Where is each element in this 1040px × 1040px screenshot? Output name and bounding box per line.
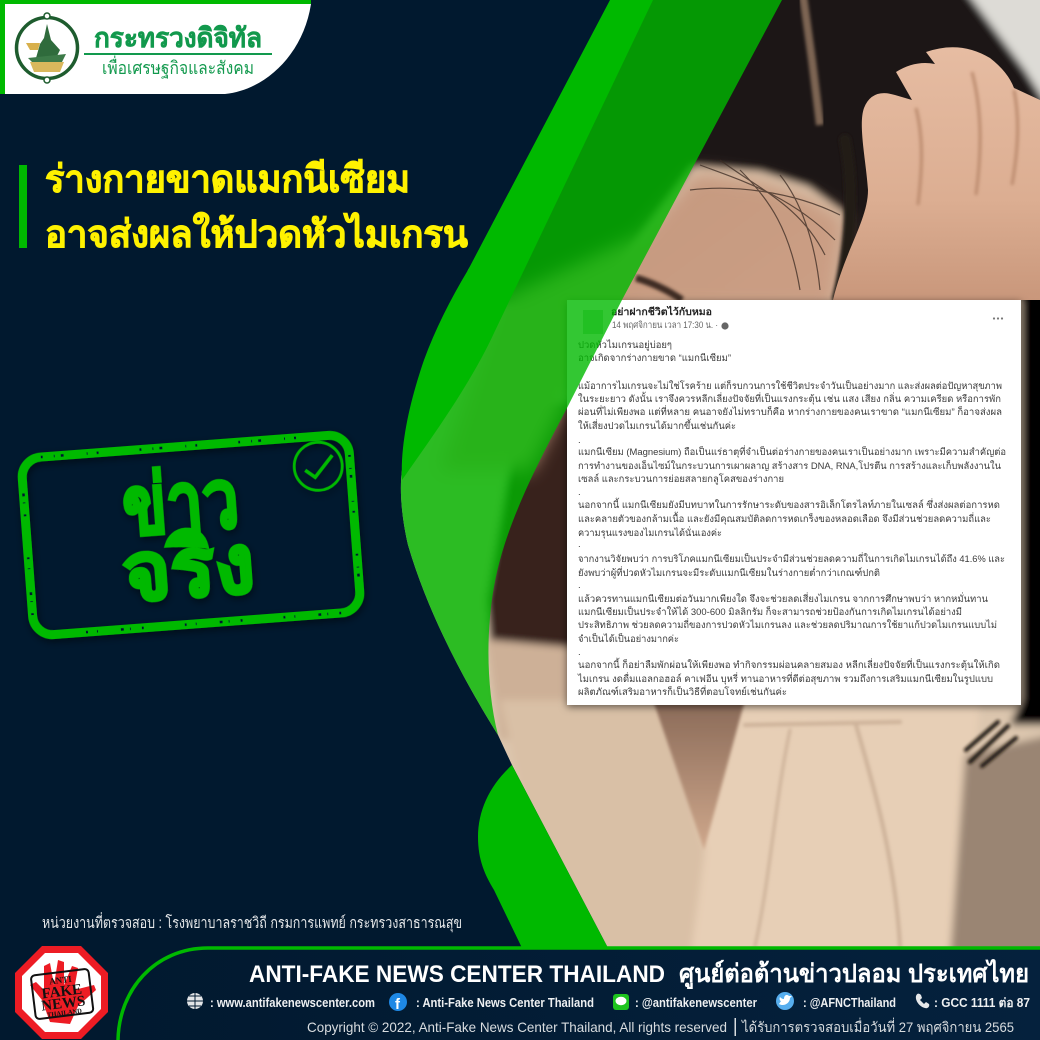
- post body text: .: [578, 435, 581, 446]
- post body text: ในระยะยาว ดังนั้น เราจึงควรหลีกเลี่ยงปัจจัยที่เป็นแรงกระตุ้น เช่น แสง เสียง กลิ่น ความเครียด หรือการพัก: [578, 391, 1001, 405]
- icon: red hand: [30, 960, 96, 1024]
- badge stamp: THAILAND: [47, 1008, 83, 1019]
- line account: : @antifakenewscenter: [635, 996, 757, 1010]
- photo: woman with headache: [380, 0, 1040, 960]
- icon: phone: [916, 994, 929, 1008]
- headline: ร่างกายขาดแมกนีเซียม: [45, 159, 410, 201]
- post body text: อาจเกิดจากร่างกายขาด “แมกนีเซียม”: [578, 352, 731, 364]
- hotline: : GCC 1111 ต่อ 87: [934, 996, 1030, 1010]
- post body text: ปวดหัวไมเกรนอยู่บ่อยๆ: [578, 339, 672, 351]
- translucent green swoosh: [401, 0, 782, 735]
- source agency: หน่วยงานที่ตรวจสอบ : โรงพยาบาลราชวิถี กรมการแพทย์ กระทรวงสาธารณสุข: [42, 912, 462, 933]
- verified date: ได้รับการตรวจสอบเมื่อวันที่ 27 พฤศจิกายน 2565: [741, 1018, 1014, 1035]
- stamp text: ข่าว: [119, 453, 242, 553]
- post date: 14 พฤศจิกายน เวลา 17:30 น. ·: [612, 319, 718, 330]
- post body text: [577, 339, 1006, 698]
- footer title thai: ศูนย์ต่อต้านข่าวปลอม ประเทศไทย: [679, 958, 1029, 990]
- lower green blob: [478, 765, 608, 948]
- footer title: ANTI-FAKE NEWS CENTER THAILAND: [249, 961, 665, 988]
- badge stamp: NEWS: [40, 993, 86, 1015]
- post author: อย่าฝากชีวิตไว้กับหมอ: [611, 305, 712, 318]
- hand: [833, 47, 1040, 300]
- neck V: [653, 700, 745, 850]
- icon: line: [613, 994, 629, 1010]
- post body text: แมกนีเซียม (Magnesium) ถือเป็นแร่ธาตุที่จำเป็นต่อร่างกายของคนเราเป็นอย่างมาก เพราะมีความสำคัญต่อ: [578, 445, 1006, 458]
- post body text: ความรุนแรงของไมเกรนได้นั่นเองค่ะ: [578, 526, 722, 539]
- post body text: แม้อาการไมเกรนจะไม่ใช่โรคร้าย แต่ก็รบกวนการใช้ชีวิตประจำวันเป็นอย่างมาก และส่งผลต่อปัญหาสุขภาพ: [578, 379, 1002, 392]
- globe glyph: [721, 322, 729, 330]
- post avatar: [583, 310, 603, 334]
- post body text: แล้วควรทานแมกนีเซียมต่อวันมากเพียงใด จึงจะช่วยลดเสี่ยงไมเกรน จากการศึกษาพบว่า หากหมั่นทาน: [578, 592, 988, 605]
- badge stamp: FAKE: [41, 982, 83, 1002]
- post body text: ให้เสี่ยงปวดไมเกรนได้มากขึ้นเช่นกันค่ะ: [578, 418, 736, 432]
- scalp parting: [803, 0, 820, 125]
- icon: twitter: [776, 992, 794, 1010]
- post body text: ไมเกรน งดดื่มแอลกอฮอล์ คาเฟอีน บุหรี่ ทานอาหารที่ดีต่อสุขภาพ รวมถึงการเสริมแมกนีเซียมในรูปแบบ: [577, 672, 993, 685]
- post body text: .: [578, 487, 581, 498]
- post body text: นอกจากนี้ ก็อย่าลืมพักผ่อนให้เพียงพอ ทำกิจกรรมผ่อนคลายสมอง หลีกเลี่ยงปัจจัยที่เป็นแรงกระตุ้นให้เกิด: [578, 657, 1000, 671]
- twitter account: : @AFNCThailand: [803, 996, 896, 1010]
- icon: ministry emblem: [16, 13, 78, 83]
- icon: facebook: f: [395, 996, 401, 1013]
- post body text: จากงานวิจัยพบว่า การบริโภคแมกนีเซียมเป็นประจำมีส่วนช่วยลดความถี่ในการเกิดไมเกรนได้ถึง 41.6% และ: [578, 552, 1005, 565]
- stamp: true news: [21, 434, 361, 636]
- stamp: true news: จริง: [119, 518, 258, 619]
- eyebrow: [636, 278, 682, 300]
- headline: [19, 159, 468, 256]
- facebook post card: [567, 300, 1021, 705]
- copyright: Copyright © 2022, Anti-Fake News Center Thailand, All rights reserved: [307, 1019, 727, 1035]
- footer panel: [118, 948, 1040, 1040]
- post body text: .: [578, 539, 581, 550]
- ministry name: กระทรวงดิจิทัล: [94, 23, 262, 53]
- headline: อาจส่งผลให้ปวดหัวไมเกรน: [45, 212, 468, 256]
- fine hairs on hairline: [690, 160, 840, 290]
- post body text: ผ่อนที่ไม่เพียงพอ แต่ที่หลาย คนอาจยังไม่ทราบก็คือ หากร่างกายของคนเราขาด “แมกนีเซียม” ก็อาจส่งผล: [578, 405, 1002, 418]
- solid green band: [402, 0, 653, 480]
- more menu: [993, 317, 1003, 320]
- post body text: การทำงานของเอ็นไซม์ในกระบวนการเผาผลาญ สร้างสาร DNA, RNA,โปรตีน การสร้างและเก็บพลังงานใน: [578, 459, 1001, 472]
- post body text: ยังพบว่าผู้ที่ปวดหัวไมเกรนจะมีระดับแมกนีเซียมในร่างกายต่ำกว่าเกณฑ์ปกติ: [578, 566, 880, 579]
- post body text: เซลล์ และกระบวนการย่อยสลายกลูโคสของร่างกาย: [578, 473, 784, 485]
- post body text: แมกนีเซียมเป็นประจำให้ได้ 300-600 มิลลิกรัม ก็จะสามารถช่วยป้องกันการเกิดไมเกรนได้อย่างมี: [578, 605, 962, 618]
- post body text: ประสิทธิภาพ ช่วยลดความถี่ของการปวดหัวไมเกรนลง และช่วยลดปริมาณการใช้ยาแก้ปวดไมเกรนแบบไม่: [578, 618, 997, 631]
- post body text: .: [578, 580, 581, 591]
- post body text: จำเป็นได้เป็นอย่างมากค่ะ: [578, 632, 679, 645]
- badge stamp: ANTI: [49, 974, 73, 986]
- hair tail and blouse folds: [745, 140, 1016, 946]
- ministry tagline: เพื่อเศรษฐกิจและสังคม: [102, 55, 254, 79]
- website: : www.antifakenewscenter.com: [210, 996, 375, 1010]
- icon: globe: [187, 993, 203, 1009]
- badge stamp: [31, 969, 94, 1020]
- post body text: ผลิตภัณฑ์เสริมอาหารก็เป็นวิธีที่ตอบโจทย์เช่นกันค่ะ: [578, 685, 787, 698]
- facebook page: : Anti-Fake News Center Thailand: [416, 996, 594, 1010]
- icon: facebook: [389, 993, 407, 1013]
- post body text: และคลายตัวของกล้ามเนื้อ และยังมีคุณสมบัติลดการหดเกร็งของหลอดเลือด จึงมีส่วนช่วยลดความถี่และ: [578, 511, 991, 525]
- post body text: นอกจากนี้ แมกนีเซียมยังมีบทบาทในการรักษาระดับของสารอิเล็กโตรไลท์ภายในเซลล์ ซึ่งส่งผลต่อการหด: [578, 497, 1000, 511]
- icon: check mark: [294, 442, 342, 490]
- anti fake news badge: [15, 946, 108, 1039]
- ministry logo panel: [0, 0, 311, 94]
- forehead: [440, 172, 846, 470]
- post body text: .: [578, 647, 581, 658]
